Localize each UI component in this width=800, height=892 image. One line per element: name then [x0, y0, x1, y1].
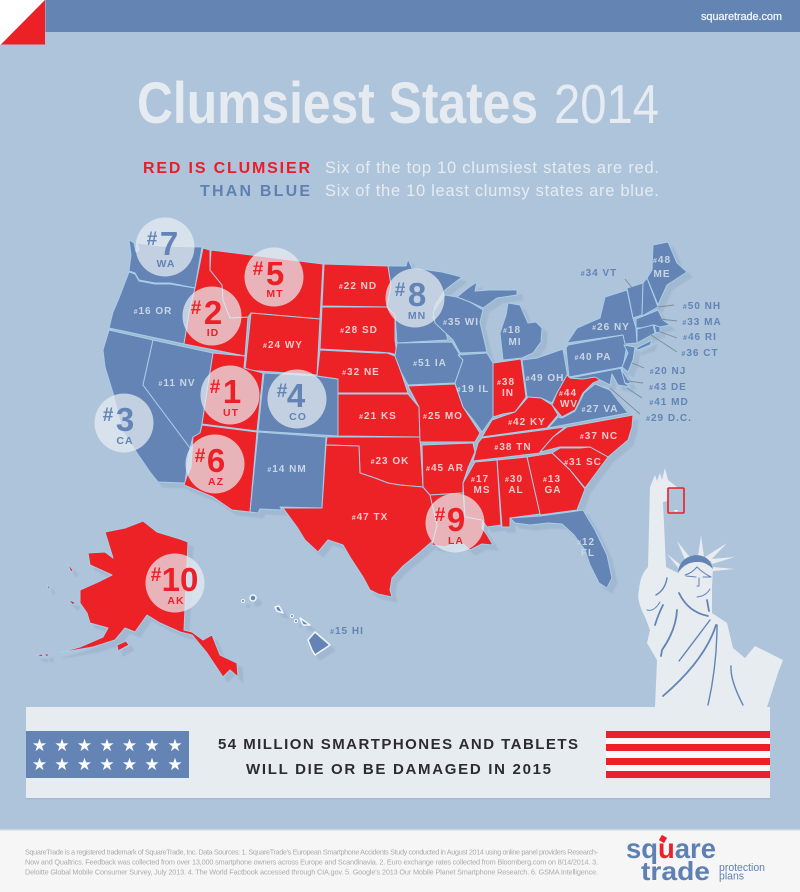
state: ND: [322, 264, 391, 307]
rank badge: #1 UT: 1: [223, 373, 241, 410]
state rank labels: #38: [497, 377, 515, 388]
state: GA: [527, 453, 585, 515]
state: VA: [548, 384, 628, 428]
state rank labels: #20 NJ: [650, 366, 686, 377]
state rank labels: #42 KY: [508, 417, 546, 428]
flag stars: ★: [99, 736, 115, 755]
rank badge: #5 MT: [244, 248, 304, 306]
state: NH: [642, 278, 658, 316]
rank badge: #8 MN: 8: [408, 276, 426, 313]
state: WY: [245, 313, 320, 375]
SquareTrade logo: protection: [719, 862, 765, 874]
statue details: [647, 555, 743, 705]
flag stars: ★: [167, 755, 183, 774]
rank badge: #6 AZ: #: [195, 446, 206, 467]
state: KY: [482, 397, 558, 437]
state: KS: [338, 394, 420, 437]
SquareTrade logo: square: [626, 833, 716, 864]
rank badge: #9 LA: #: [435, 505, 446, 526]
flag stars: ★: [122, 755, 137, 774]
rank badge: #2 ID: #: [191, 298, 202, 319]
banner headline: WILL DIE OR BE DAMAGED IN 2015: [246, 761, 551, 778]
flag stars: [26, 731, 189, 778]
footer disclaimer: Deloitte Global Mobile Consumer Survey, July 2013. 4. The World Factbook accessed through CIA.gov. 5. Google's 2013 Our Mobile Planet Smartphone Research. 6. GSMA Intelligence.: [25, 868, 598, 876]
state: NJ: [622, 345, 635, 372]
state: IN: [493, 359, 526, 417]
state: MT: [210, 250, 323, 319]
state: AR: [422, 443, 475, 495]
state rank labels: #14 NM: [267, 464, 307, 475]
flag stars: ★: [54, 755, 70, 774]
state rank labels: MI: [508, 337, 522, 348]
state: AZ: [184, 425, 257, 512]
state rank labels: #31 SC: [564, 457, 602, 468]
rank badge: #6 AZ: 6: [207, 442, 225, 479]
rank badge: #9 LA: LA: [448, 535, 464, 547]
flag stripes: [606, 731, 770, 778]
flag stars: ★: [54, 736, 70, 755]
state rank labels: #37 NC: [580, 431, 618, 442]
rank badge: #10 AK: AK: [167, 595, 185, 607]
Alaska islands: [36, 563, 129, 657]
state: TN: [473, 427, 565, 461]
flag stars: ★: [32, 736, 47, 755]
subheading: THAN BLUE: [200, 183, 310, 200]
flag stars: ★: [167, 736, 183, 755]
statue silhouette: [638, 468, 783, 707]
rank badge: #3 CA: 3: [116, 401, 134, 438]
subheading: Six of the top 10 clumsiest states are red.: [325, 159, 659, 177]
state: MI lower: [500, 303, 542, 360]
state: TX: [283, 445, 437, 597]
subheading: [143, 159, 659, 200]
rank badge: #8 MN: [386, 268, 444, 328]
state: MN: [387, 259, 462, 343]
state: AL: [497, 457, 540, 527]
rank badge: #8 MN: MN: [408, 310, 426, 322]
state rank labels: #35 WI: [443, 317, 479, 328]
banner headline: 54 MILLION SMARTPHONES AND TABLETS: [218, 736, 578, 753]
footer: [0, 829, 800, 892]
state rank labels: #32 NE: [342, 367, 380, 378]
flag stars: ★: [32, 755, 47, 774]
state rank labels: #27 VA: [582, 404, 618, 415]
flag stars: ★: [77, 755, 92, 774]
rank badge: #7 WA: WA: [157, 258, 175, 270]
rank badge: #7 WA: [136, 218, 194, 276]
state rank labels: FL: [581, 548, 595, 559]
state: MD: [570, 368, 630, 387]
site url: squaretrade.com: [701, 11, 782, 23]
state rank labels: IN: [502, 388, 514, 399]
flag stars: ★: [77, 736, 92, 755]
state rank labels: #50 NH: [683, 301, 721, 312]
footer disclaimer: SquareTrade is a registered trademark of SquareTrade, Inc. Data Sources: 1. SquareTrade's European Smartphone Accidents Study conducted in August 2014 using online panel providers Research-: [25, 848, 599, 856]
flag stars: ★: [144, 755, 160, 774]
Hawaii: [242, 595, 330, 655]
state rank labels: #28 SD: [340, 325, 378, 336]
state: OK: [326, 437, 423, 487]
state: UT: [202, 353, 263, 431]
state rank labels: #43 DE: [649, 382, 687, 393]
state: MI upper: [457, 282, 517, 308]
state: OH: [522, 349, 568, 403]
title: Clumsiest States: [137, 71, 538, 136]
state: NM: [250, 432, 326, 513]
rank badge: #5 MT: MT: [266, 288, 284, 300]
rank badge: #5 MT: 5: [266, 255, 284, 292]
state: CO: [258, 373, 338, 436]
footer disclaimer: Now and Qualtrics. Feedback was collected from over 13,000 smartphone owners across Europe and Scandinavia. 2. Euro exchange rates collected from Bloomberg.com on 8/14/2014. 3.: [25, 858, 598, 866]
state rank labels: #38 TN: [494, 442, 532, 453]
map of US states: [36, 240, 687, 677]
state rank labels: #34 VT: [581, 268, 617, 279]
state: MO: [408, 384, 480, 442]
rank badge: #2 ID: ID: [207, 327, 219, 339]
state rank labels: #45 AR: [426, 463, 464, 474]
rank badge: #8 MN: #: [395, 280, 406, 301]
state rank labels: #47 TX: [352, 512, 388, 523]
state: ID: [184, 248, 248, 356]
rank badge: #1 UT: #: [210, 377, 221, 398]
rank badge: #5 MT: #: [253, 259, 264, 280]
rank badge: #10 AK: 10: [162, 561, 198, 598]
rank badge: #3 CA: [94, 394, 154, 452]
state: RI: [654, 325, 660, 333]
state rank labels: #22 ND: [339, 281, 377, 292]
rank badge: #4 CO: #: [277, 381, 288, 402]
state: NC: [540, 415, 633, 457]
state: MA: [636, 310, 670, 328]
state: WV: [552, 375, 600, 417]
rank badge: #2 ID: [182, 286, 242, 346]
state: FL: [510, 510, 612, 588]
state rank labels: #23 OK: [371, 456, 409, 467]
Statue of Liberty holding phone: [638, 468, 783, 707]
state rank labels: #12: [577, 537, 595, 548]
state: ME: [647, 242, 687, 305]
state: VT: [627, 283, 643, 318]
state: SC: [552, 447, 608, 488]
state rank labels: [134, 255, 722, 637]
state: SD: [320, 307, 397, 355]
state rank labels: WV: [560, 399, 578, 410]
corner fold: [0, 0, 46, 45]
state rank labels: #49 OH: [526, 373, 564, 384]
rank badge: #10 AK: #: [151, 565, 162, 586]
rank badge: #3 CA: CA: [116, 435, 134, 447]
state: MS: [463, 460, 501, 527]
state rank labels: #17: [471, 474, 489, 485]
rank badge: #2 ID: 2: [204, 294, 222, 331]
state: WI: [433, 295, 487, 353]
state rank labels: #18: [503, 325, 521, 336]
rank badge: #7 WA: #: [147, 229, 158, 250]
title: 2014: [554, 73, 659, 135]
rank badge: #10 AK: [146, 554, 204, 612]
state: IA: [395, 342, 463, 385]
state: PA: [566, 335, 627, 377]
rank badge: #6 AZ: [186, 434, 244, 494]
rank badge: #7 WA: 7: [160, 225, 178, 262]
SquareTrade logo: [626, 833, 765, 886]
state rank labels: #51 IA: [413, 358, 447, 369]
state rank labels: #41 MD: [649, 397, 689, 408]
state rank labels: ME: [654, 269, 670, 280]
state rank labels: MS: [474, 485, 490, 496]
flag stars: ★: [122, 736, 137, 755]
rank badge: #6 AZ: AZ: [208, 476, 224, 488]
state rank labels: #46 RI: [683, 332, 717, 343]
leader lines for small northeastern states: [610, 279, 677, 414]
state rank labels: #19 IL: [457, 384, 489, 395]
flag stars: ★: [144, 736, 160, 755]
rank badge: #4 CO: 4: [287, 377, 306, 414]
state rank labels: #16 OR: [134, 306, 172, 317]
state: NE: [317, 350, 408, 393]
footer disclaimer: [25, 848, 599, 876]
state rank labels: GA: [544, 485, 562, 496]
state rank labels: #48: [653, 255, 671, 266]
phone icon: [668, 488, 684, 513]
SquareTrade logo: plans: [719, 870, 744, 882]
rank badge: #9 LA: [426, 494, 484, 552]
state: CT: [637, 325, 655, 343]
state: OR: [109, 272, 195, 344]
state: AK: [58, 521, 238, 677]
state: IL: [455, 353, 493, 432]
state rank labels: #13: [543, 474, 561, 485]
top bar: [0, 0, 800, 32]
state rank labels: #24 WY: [263, 340, 303, 351]
rank badge: #9 LA: 9: [447, 501, 465, 538]
state rank labels: AL: [508, 485, 524, 496]
state rank labels: #40 PA: [575, 352, 611, 363]
state rank labels: #15 HI: [330, 626, 364, 637]
banner panel: [26, 707, 770, 800]
state: WA: [129, 240, 202, 288]
state: Long Island: [636, 340, 652, 350]
subheading: RED IS CLUMSIER: [143, 160, 310, 177]
state: NY: [567, 290, 637, 344]
state rank labels: #26 NY: [592, 322, 630, 333]
rank badge: #3 CA: #: [103, 405, 114, 426]
rank badge: #1 UT: UT: [223, 407, 239, 419]
state rank labels: #33 MA: [682, 317, 722, 328]
state rank labels: #30: [505, 474, 523, 485]
state rank labels: #29 D.C.: [646, 413, 692, 424]
state: DE: [621, 369, 631, 384]
rank badge: #4 CO: [268, 370, 326, 428]
state: NV: [143, 340, 213, 448]
state rank labels: #36 CT: [681, 348, 719, 359]
state: LA: [430, 493, 493, 550]
state: CA: [103, 330, 190, 483]
banner headline: [218, 736, 578, 778]
state rank labels: #25 MO: [423, 411, 463, 422]
rank badge: #1 UT: [200, 366, 260, 424]
SquareTrade logo: trade: [641, 856, 710, 886]
subheading: Six of the 10 least clumsy states are blue.: [325, 182, 659, 200]
state rank labels: #11 NV: [158, 378, 196, 389]
state rank labels: #21 KS: [359, 411, 397, 422]
flag stars: ★: [99, 755, 115, 774]
statue crown rays: [667, 535, 735, 571]
rank badge: #4 CO: CO: [289, 411, 307, 423]
state rank labels: #44: [559, 388, 577, 399]
